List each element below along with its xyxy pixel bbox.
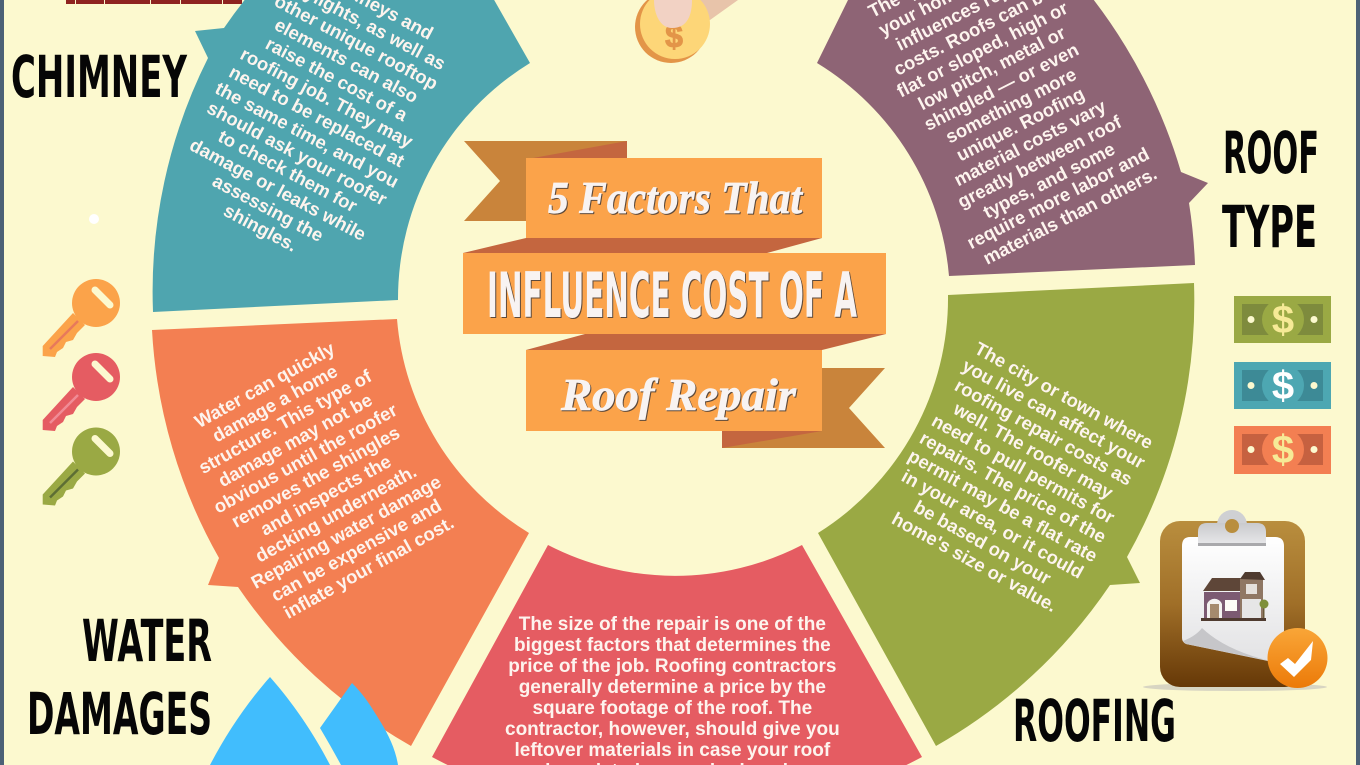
repair size text: The size of the repair is one of the xyxy=(519,614,826,635)
icon: coin and hand: $ xyxy=(665,18,683,54)
water damages text: Repairing water damage xyxy=(247,471,445,593)
roofing text: The city or town where xyxy=(971,338,1157,453)
heading: water damages xyxy=(27,607,212,748)
heading: roofing: ROOFING xyxy=(1013,687,1176,755)
panel: roof type xyxy=(817,0,1208,276)
ribbon tail top xyxy=(464,141,627,221)
roofing text: well. The roofer may xyxy=(949,397,1117,503)
heading: water damages: WATER xyxy=(82,607,212,675)
roofing text: in your area, or it could xyxy=(898,465,1087,583)
roof type text: greatly between roof xyxy=(954,111,1125,212)
chimney text: need to be replaced at xyxy=(226,61,408,171)
heading: chimney: CHIMNEY xyxy=(11,43,188,111)
title line 1: 5 Factors That xyxy=(548,172,803,223)
roof type text: material costs vary xyxy=(950,95,1110,190)
title banner xyxy=(463,141,886,448)
water damages text: can be expensive and xyxy=(267,495,445,606)
repair size text: biggest factors that determines the xyxy=(514,635,831,656)
icon: red key xyxy=(43,353,120,431)
chimney text: shingles. xyxy=(220,200,301,256)
roofing text: permit may be a flat rate xyxy=(905,445,1101,566)
panel: water damages xyxy=(152,319,529,746)
decorative dot xyxy=(89,214,99,224)
title banner: INFLUENCE COST OF A xyxy=(487,259,857,332)
repair size text: square footage of the roof. The xyxy=(532,698,812,719)
icon: green key xyxy=(43,428,120,506)
roofing text: need to pull permits for xyxy=(928,410,1118,528)
icon: orange bill xyxy=(1234,426,1331,474)
icon: coin and hand xyxy=(635,0,738,63)
roofing text: you live can affect your xyxy=(959,355,1149,473)
water damages text: damage a home xyxy=(208,360,341,446)
heading: water damages: DAMAGES xyxy=(27,680,212,748)
chimney text: to check them for xyxy=(215,125,361,216)
roof type text: something more xyxy=(942,63,1080,147)
panel: chimney xyxy=(153,0,530,312)
icon: teal bill xyxy=(1234,362,1331,409)
heading: roof type xyxy=(1222,119,1319,261)
chimney text: the same time, and you xyxy=(212,77,402,192)
water damages text: structure. This type of xyxy=(195,365,376,478)
chimney text: should ask your roofer xyxy=(204,97,391,209)
check badge xyxy=(1268,628,1328,688)
icon: chimney bricks xyxy=(66,0,242,4)
water damages text: Water can quickly xyxy=(191,337,339,432)
roof type text: types, and some xyxy=(980,138,1118,222)
roof type text: unique. Roofing xyxy=(953,83,1088,165)
repair size text: contractor, however, should give you xyxy=(505,719,840,740)
water damages text: and inspects the xyxy=(257,450,395,540)
chimney text: elements can also xyxy=(271,14,422,107)
water damages text: obvious until the roofer xyxy=(210,399,401,518)
icon: green bill xyxy=(1234,296,1331,343)
title line 3: Roof Repair xyxy=(560,369,797,420)
water damages text: removes the shingles xyxy=(228,422,403,532)
repair size text: generally determine a price by the xyxy=(519,677,826,698)
ribbon tail bottom xyxy=(722,368,885,448)
icon: green bill: $ xyxy=(1272,298,1294,342)
panel: location / roofing xyxy=(818,283,1194,746)
roof type text: materials than others. xyxy=(979,163,1160,269)
icon: clipboard with house xyxy=(1143,510,1328,691)
water damages text: decking underneath. xyxy=(252,460,420,566)
panel: repair size xyxy=(432,545,922,765)
roof type text: low pitch, metal or xyxy=(915,22,1069,114)
repair size text: leftover materials in case your roof xyxy=(514,740,831,761)
icon: orange key xyxy=(43,279,120,357)
ribbon folds xyxy=(463,238,886,350)
repair size text: price of the job. Roofing contractors xyxy=(508,656,837,677)
roof type text: flat or sloped, high or xyxy=(893,0,1071,101)
chimney text: damage or leaks while xyxy=(186,134,370,245)
water damages text: damage may not be xyxy=(214,389,376,491)
ribbon bands xyxy=(463,158,886,431)
water damages text: inflate your final cost. xyxy=(280,512,457,623)
roofing text: roofing repair costs as xyxy=(951,375,1136,490)
roofing text: be based on your xyxy=(910,496,1055,589)
house xyxy=(1201,572,1268,621)
roofing text: repairs. The price of the xyxy=(916,427,1110,547)
chimney text: assessing the xyxy=(209,170,327,246)
chimney text: roofing job. They may xyxy=(237,43,417,152)
icon: water drops xyxy=(210,677,398,765)
icon: orange bill: $ xyxy=(1272,428,1294,472)
roofing text: home's size or value. xyxy=(888,508,1061,616)
roof type text: require more labor and xyxy=(963,143,1152,253)
icon: teal bill: $ xyxy=(1272,364,1294,408)
chimney text: raise the cost of a xyxy=(262,33,412,126)
roof type text: shingled — or even xyxy=(920,39,1082,135)
